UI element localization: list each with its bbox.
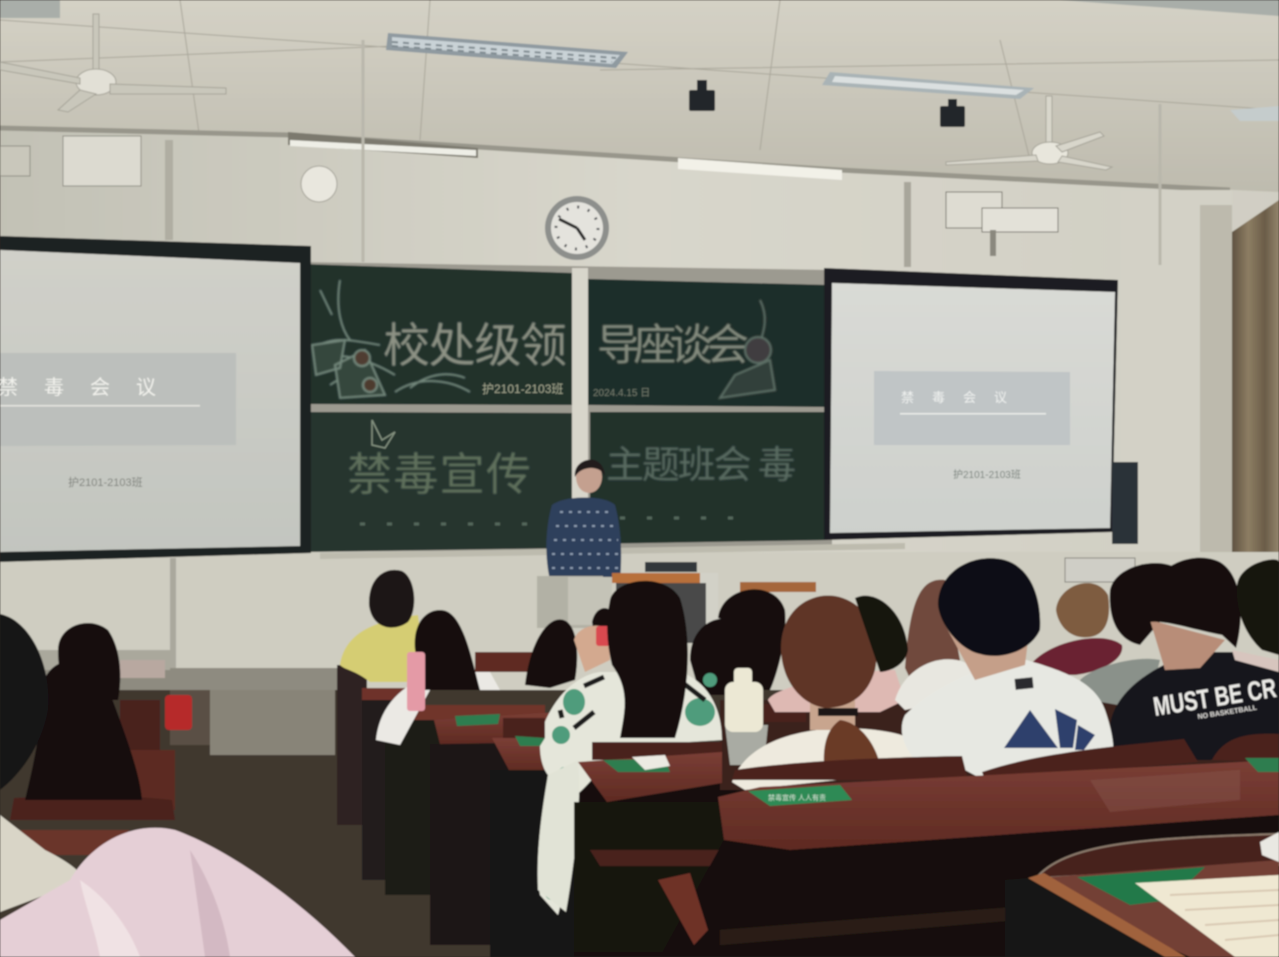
left slide rule [0,405,200,406]
desk row green-shirt level [574,752,724,952]
pink bottle [407,652,425,711]
lower wall [0,552,1279,702]
left slide title: 禁毒会议 [0,376,182,399]
ceiling spotlights [689,80,965,127]
hanging poles [363,40,1160,265]
shirt [538,672,722,915]
ceiling lights [0,0,1279,180]
notebook lines [1170,890,1279,940]
student far right [1232,559,1279,672]
black shirt [1110,652,1279,760]
panel: chalkboard [298,262,905,559]
mid student hair [25,660,142,800]
class label: 护2101-2103班 [482,382,563,396]
chalkboard lower left [302,412,572,552]
left slide title band [0,353,236,446]
teacher body [546,498,621,580]
right slide rule [900,413,1046,414]
front desk [1005,832,1279,957]
right slide title: 禁毒会议 [901,390,1025,405]
student in green patterned shirt [538,581,722,915]
neck [945,625,1030,680]
neck and ear [1150,620,1225,670]
hair [369,570,414,628]
subheading left: 禁毒宣传 [347,449,531,500]
tissue [632,755,670,770]
hand and phone [574,626,610,672]
student with glasses in maroon [1030,583,1122,675]
ceiling fan right [946,96,1112,170]
student in grey top [1080,563,1180,705]
hair [1147,558,1241,648]
chair backs middle [503,704,806,760]
right slide caption: 护2101-2103班 [953,468,1021,481]
main desk [658,760,1279,957]
heading right: 导座谈会 [597,322,749,370]
student in white MLB shirt [902,558,1113,778]
ceiling fan left [0,14,226,112]
teacher pattern [552,512,620,568]
ponytail [824,720,880,765]
open notebook [1135,875,1279,957]
green motifs [544,673,717,900]
white cloth [1260,832,1279,862]
panel: left projection screen [0,236,311,562]
left desks [120,660,165,678]
NY emblem [1004,709,1095,750]
back desks [337,652,574,957]
right slide title band [874,371,1070,445]
student in yellow shirt [340,570,422,682]
chalk flowers left [312,280,470,398]
white shirt [902,658,1113,778]
chalk flowers right [720,300,775,398]
shirt sub-slogan: NO BASKETBALL [1197,705,1258,721]
cream shirt [732,728,930,790]
hair [938,558,1040,656]
black dashes [560,677,705,728]
green desk card [1077,867,1205,905]
lectern [537,562,816,643]
chalk lower dots [360,518,740,524]
teacher hair [575,460,605,477]
hair [781,595,877,708]
dark monitor at right wall [1112,462,1138,544]
student in Must Be Crazy shirt [1110,558,1279,760]
radiator [1065,558,1135,582]
neck [810,700,855,730]
chalk dove [372,420,395,448]
red bag [165,695,192,730]
green desk cards back rows [455,714,1279,772]
chalkboard lower right [590,412,828,544]
student with ponytail [732,595,930,790]
back student hair [58,623,120,700]
water bottle [725,668,768,765]
round wall sensor [301,166,337,202]
student with pink bottle [376,610,500,745]
yellow shirt [340,615,422,682]
pink coat foreground [0,828,355,957]
panel: right projection screen [824,268,1118,540]
near student hair [0,614,48,790]
left slide caption: 护2101-2103班 [68,475,143,489]
girl in white at centre right [855,580,975,710]
right wall and curtain [1120,190,1279,570]
front chair back [1038,834,1279,878]
wall clock [545,196,609,260]
floor [0,690,1279,957]
card slogan: 禁毒宣传 人人有责 [768,793,826,802]
teacher head [576,461,602,493]
chalkboard ledge [320,543,905,559]
student middle row back [525,619,577,688]
projector left [0,136,141,186]
date label: 2024.4.15 日 [593,388,650,399]
cream shirt [0,815,85,912]
chalkboard upper left [302,264,572,405]
dark-haired group behind [592,589,785,695]
lower long shirt [538,760,579,912]
green desk card front row [748,785,852,806]
hair [415,610,480,690]
white sleeve [376,672,500,745]
upper wall [0,128,1279,570]
chalkboard upper right [588,279,828,407]
projector right [946,192,1058,256]
heading left: 校处级领 [383,319,567,372]
hair tie [818,708,858,716]
subheading right: 主题班会 毒 [606,445,796,487]
logo patch [1015,677,1034,690]
ceiling [0,0,1279,200]
chair backs front [732,734,1279,780]
pink-clothed student behind [768,670,905,712]
front-left students [0,614,192,912]
teacher [546,460,621,580]
chalkboard centre post [572,268,588,548]
long black hair [607,581,688,738]
